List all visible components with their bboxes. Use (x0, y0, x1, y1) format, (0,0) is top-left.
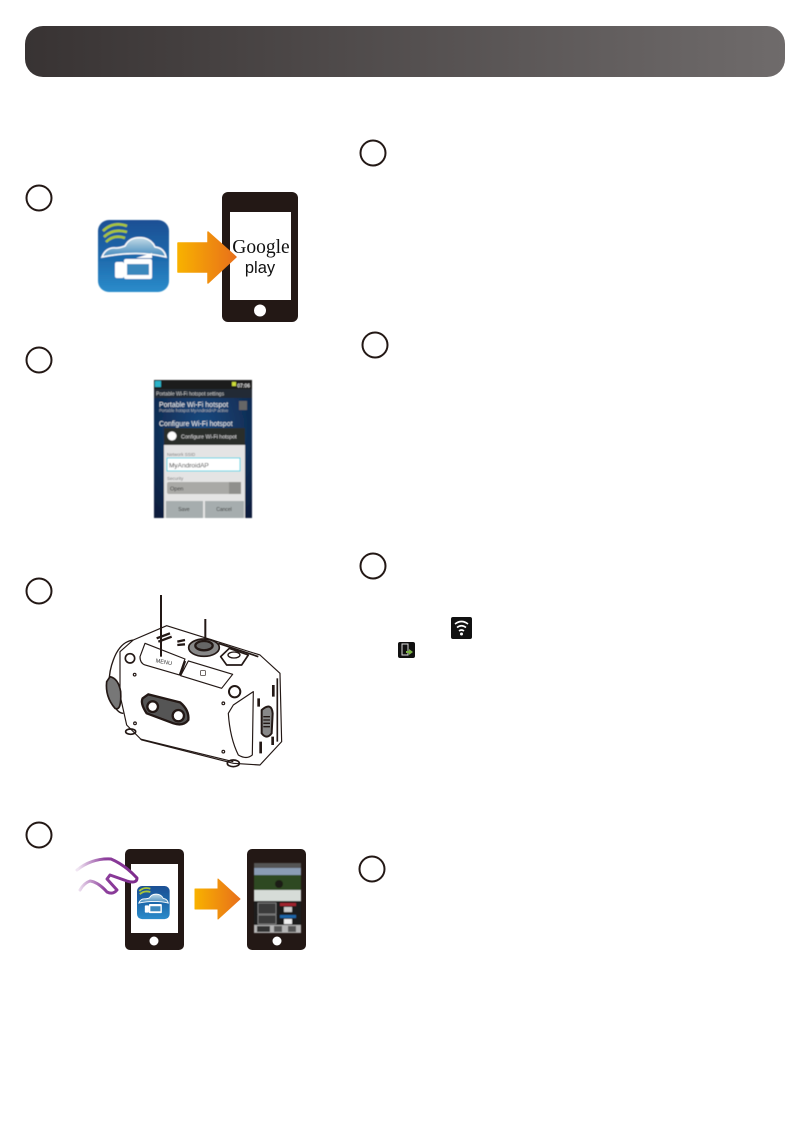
screenshot: Wi-Fi hotspot settings: Portable Wi-Fi hotspot settings (156, 392, 225, 398)
step marker 1 (26, 186, 52, 210)
screenshot: Wi-Fi hotspot settings: Configure Wi-Fi hotspot (181, 434, 237, 440)
hand tapping app (77, 859, 137, 893)
camera illustration (106, 595, 282, 767)
screenshot: Wi-Fi hotspot settings: 07:06 (237, 384, 250, 390)
step marker 5 (360, 140, 386, 166)
screenshot: Wi-Fi hotspot settings: Network SSID (167, 452, 196, 457)
phone with Google Play (222, 192, 298, 322)
screenshot: Wi-Fi hotspot settings: Cancel (216, 507, 232, 513)
screenshot: Wi-Fi hotspot settings: Configure Wi-Fi hotspot (159, 421, 233, 428)
phone with app screen (247, 849, 306, 950)
step marker 7 (360, 554, 386, 578)
step marker 3 (26, 578, 52, 604)
step marker 2 (26, 348, 52, 372)
camera illustration: MENU (155, 658, 172, 667)
step marker 4 (26, 822, 52, 848)
screenshot: Wi-Fi hotspot settings: Security (167, 476, 184, 481)
screenshot: Wi-Fi hotspot settings: Open (170, 486, 183, 492)
icon: phone connection (398, 642, 415, 658)
screenshot: Wi-Fi hotspot settings: MyAndroidAP (169, 462, 209, 470)
arrow: to store (178, 232, 236, 283)
phone with app icon (125, 849, 184, 950)
screenshot: Wi-Fi hotspot settings: Portable hotspot MyAndroidAP active (159, 408, 229, 413)
screenshot: Wi-Fi hotspot settings: Save (178, 507, 190, 513)
phone with Google Play: Google (232, 237, 290, 258)
icon: small camera app (137, 886, 170, 919)
screenshot: Wi-Fi hotspot settings: Portable Wi-Fi hotspot (159, 402, 228, 409)
step marker 8 (360, 856, 384, 882)
screenshot: Wi-Fi hotspot settings (154, 380, 252, 518)
step marker 6 (362, 332, 388, 358)
phone with Google Play: play (245, 259, 276, 277)
icon: camera app (98, 220, 169, 292)
icon: Wi-Fi (451, 617, 472, 639)
header bar (25, 26, 785, 77)
arrow: launches app (195, 879, 240, 919)
